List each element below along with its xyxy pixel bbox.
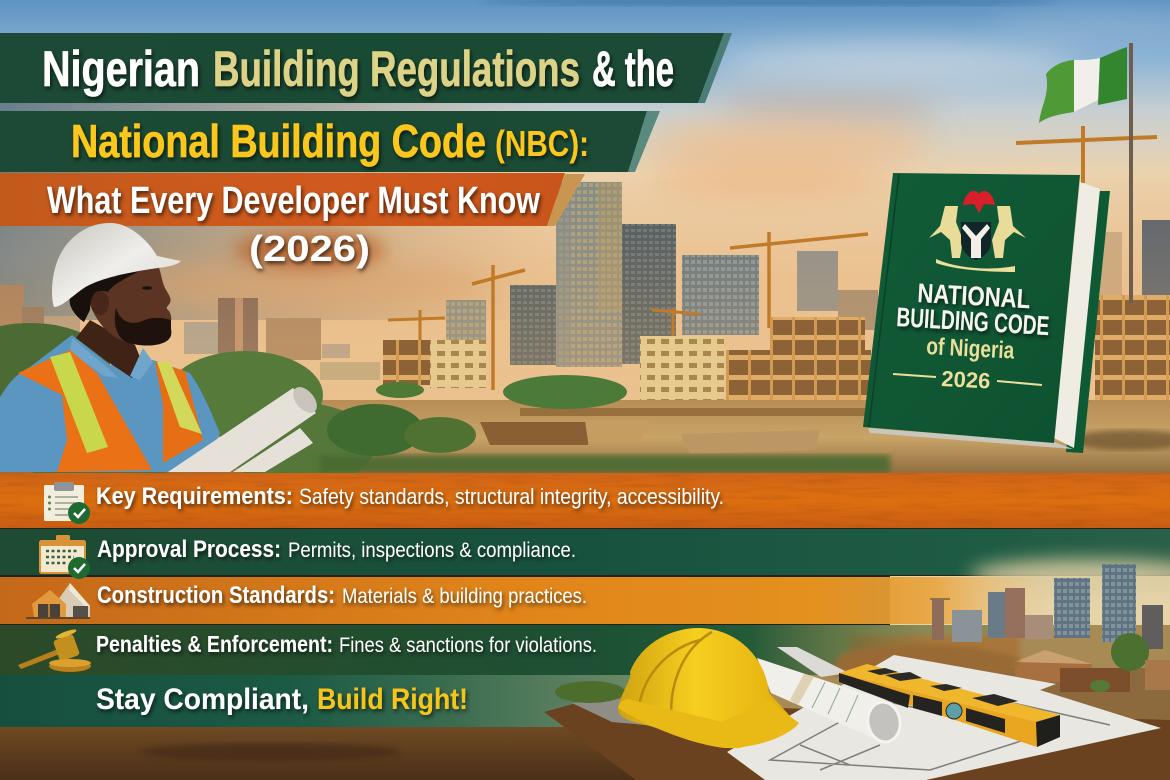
band: stay compliant call to action: Build Right! <box>317 683 468 716</box>
band: approval process: Approval Process: <box>97 536 281 563</box>
white helmet <box>52 223 181 307</box>
hair <box>70 266 150 322</box>
lower right skyline <box>930 564 1163 649</box>
vest left panel <box>18 350 152 472</box>
construction cranes <box>388 126 1157 400</box>
band: penalties and enforcement: Penalties & Enforcement: <box>96 631 333 657</box>
title banner: second line: (NBC): <box>495 123 589 164</box>
shirt <box>0 335 220 472</box>
title banner: first line: & the <box>592 41 674 97</box>
title banner: third line: What Every Developer Must Know <box>47 180 540 222</box>
year glow <box>235 232 385 268</box>
right reflective strip <box>157 362 202 434</box>
foliage behind helmet <box>555 681 625 703</box>
book title: BUILDING CODE <box>896 302 1050 341</box>
band: stay compliant call to action <box>0 675 640 727</box>
distant city skyline <box>0 180 1170 400</box>
rolled blueprints <box>757 647 903 744</box>
ground and rubble <box>0 400 1170 475</box>
worker in hard hat <box>0 223 322 472</box>
front cover <box>863 173 1080 443</box>
band: stay compliant call to action: Stay Compliant, <box>96 683 309 716</box>
band: key requirements: Key Requirements: <box>96 483 293 510</box>
band: approval process <box>0 529 1170 575</box>
title banner: second line <box>0 111 660 172</box>
title banner: third line <box>0 173 585 226</box>
icon: clipboard checklist <box>44 482 90 524</box>
ear and eye <box>91 291 109 315</box>
concrete slab top <box>572 698 645 725</box>
book subtitle: of Nigeria <box>926 333 1015 365</box>
coat of arms eagle <box>963 191 995 213</box>
year label: (2026) <box>249 228 370 269</box>
spirit level <box>839 664 1060 747</box>
band: construction standards <box>0 577 1170 624</box>
left reflective strip <box>50 352 108 453</box>
bottom soil <box>0 727 1170 780</box>
icon: gavel <box>18 628 91 672</box>
right horizon sky <box>890 559 1170 666</box>
band: key requirements: Safety standards, structural integrity, accessibility. <box>299 484 724 509</box>
book title <box>896 278 1050 341</box>
title banner: first line: Nigerian <box>42 41 200 97</box>
band: construction standards: Materials & building practices. <box>342 585 587 608</box>
band: construction standards: Construction Standards: <box>97 582 335 609</box>
blueprint rolls <box>168 388 316 472</box>
neck <box>76 320 142 378</box>
band: penalties and enforcement: Fines & sanctions for violations. <box>339 634 597 657</box>
band: penalties and enforcement <box>0 625 1170 675</box>
buildings under construction <box>320 295 1170 406</box>
lower right village and trees <box>830 633 1170 692</box>
coat of arms supporters and shield <box>929 206 1026 272</box>
flag of Nigeria on pole <box>1039 43 1133 303</box>
trees and greenery <box>0 323 890 487</box>
title banner: first line <box>0 33 732 103</box>
yellow hard hat <box>618 628 799 748</box>
bottom pages <box>868 428 1073 449</box>
band: approval process: Permits, inspections & compliance. <box>288 539 576 562</box>
back cover <box>1066 191 1110 453</box>
page block <box>1054 182 1100 448</box>
head <box>88 262 171 345</box>
collar <box>70 338 153 380</box>
earth plinth <box>544 702 1170 780</box>
blueprint plans sheet <box>727 655 1161 780</box>
background: sky <box>0 0 1170 480</box>
title banner: first line: Building Regulations <box>213 41 580 97</box>
book title: NATIONAL <box>917 278 1031 314</box>
book: National Building Code of Nigeria <box>863 173 1110 453</box>
icon: calendar with check <box>40 535 90 579</box>
book year: 2026 <box>941 366 991 394</box>
vest right panel <box>155 362 203 463</box>
title banner: second line: National Building Code <box>71 115 486 167</box>
icon: house <box>26 583 90 619</box>
lower background landscape <box>580 625 1170 738</box>
beard <box>115 308 171 346</box>
band: key requirements <box>0 473 1170 528</box>
